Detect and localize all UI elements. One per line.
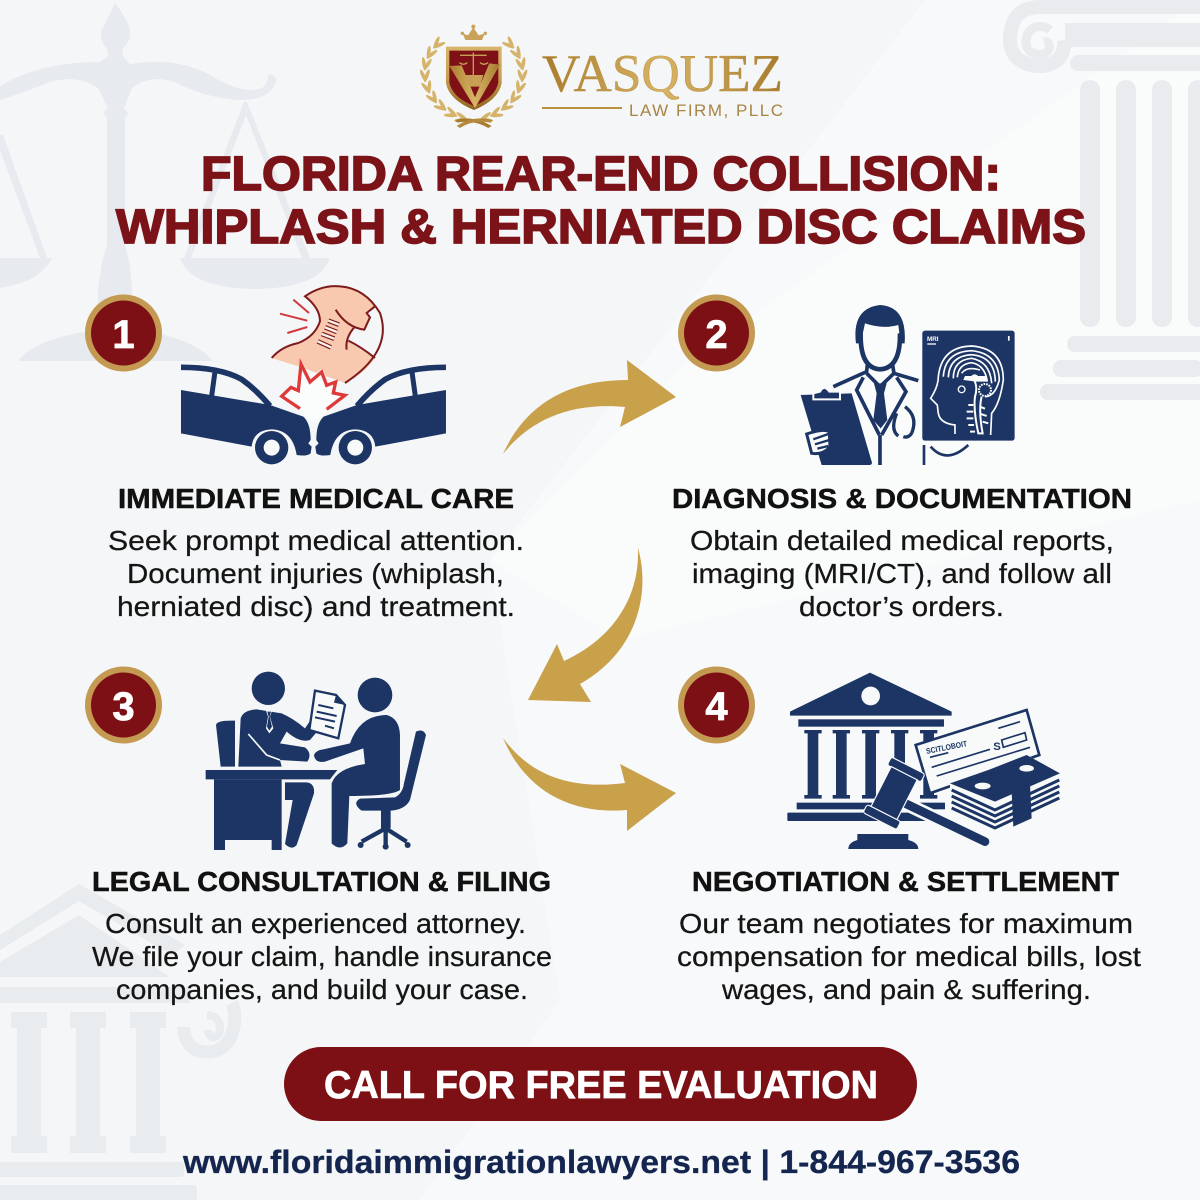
icon: car collision and neck injury xyxy=(181,286,446,464)
courthouse xyxy=(787,673,952,821)
logo xyxy=(418,25,783,128)
attorney xyxy=(216,672,324,767)
body 4: compensation for medical bills, lost xyxy=(677,941,1141,972)
body 3: We file your claim, handle insurance xyxy=(92,941,552,972)
badge 1: 1 xyxy=(112,313,135,357)
client xyxy=(314,678,426,850)
heading 3: LEGAL CONSULTATION & FILING xyxy=(92,866,551,897)
badge 4 xyxy=(678,666,755,744)
body 2: imaging (MRI/CT), and follow all xyxy=(692,558,1112,589)
doctor xyxy=(833,305,918,465)
logo tagline: LAW FIRM, PLLC xyxy=(629,101,783,120)
badge 4: 4 xyxy=(705,685,728,729)
body 2: Obtain detailed medical reports, xyxy=(690,525,1114,556)
body 4: wages, and pain & suffering. xyxy=(721,974,1091,1005)
body 4: Our team negotiates for maximum xyxy=(679,908,1133,939)
settlement check xyxy=(916,710,1039,793)
heading 4: NEGOTIATION & SETTLEMENT xyxy=(692,866,1119,897)
watermark: scales of justice xyxy=(0,3,330,361)
clipboard xyxy=(801,388,872,465)
MRI panel xyxy=(922,331,1015,465)
title xyxy=(116,148,1086,254)
wreath xyxy=(418,35,529,128)
badge 3 xyxy=(85,666,162,744)
heading 1: IMMEDIATE MEDICAL CARE xyxy=(118,483,514,514)
arrow: step 2 to 3 xyxy=(528,548,642,702)
body 1: herniated disc) and treatment. xyxy=(117,591,515,622)
body 1 xyxy=(108,525,524,622)
watermark: column xyxy=(1010,7,1200,400)
badge 2 xyxy=(678,294,755,372)
body 2: doctor’s orders. xyxy=(799,591,1004,622)
icon: doctor with MRI xyxy=(801,305,1015,465)
impact burst xyxy=(281,364,345,420)
arrow: step 3 to 4 xyxy=(503,738,676,831)
body 1: Document injuries (whiplash, xyxy=(127,558,504,589)
icon: courthouse, gavel, settlement xyxy=(787,673,1060,849)
watermark: courthouse xyxy=(0,884,235,1200)
neck injury xyxy=(272,286,383,383)
badge 2: 2 xyxy=(705,313,728,357)
cash stack xyxy=(950,755,1060,832)
right car xyxy=(315,367,446,464)
MRI panel: MRI xyxy=(927,336,939,343)
desk xyxy=(206,770,337,850)
title: FLORIDA REAR-END COLLISION: xyxy=(201,148,1001,201)
body 2 xyxy=(690,525,1114,622)
arrow: step 1 to 2 xyxy=(503,360,676,454)
title: WHIPLASH & HERNIATED DISC CLAIMS xyxy=(116,201,1086,254)
body 3 xyxy=(92,908,552,1005)
gavel xyxy=(848,758,985,849)
body 3: Consult an experienced attorney. xyxy=(105,908,526,939)
contact line: www.floridaimmigrationlawyers.net | 1-844-967-3536 xyxy=(182,1144,1020,1180)
badge 3: 3 xyxy=(112,685,135,729)
body 4 xyxy=(677,908,1141,1005)
body 3: companies, and build your case. xyxy=(116,974,528,1005)
icon: legal consultation xyxy=(206,672,426,850)
left car xyxy=(181,367,312,464)
call to action button xyxy=(284,1047,917,1121)
logo wordmark: VASQUEZ xyxy=(542,45,783,103)
document xyxy=(309,691,345,738)
settlement check: SCITLOBOIT xyxy=(925,739,968,756)
call to action button: CALL FOR FREE EVALUATION xyxy=(324,1064,878,1107)
body 1: Seek prompt medical attention. xyxy=(108,525,524,556)
badge 1 xyxy=(85,294,162,372)
cars xyxy=(181,367,446,464)
logo emblem xyxy=(418,25,529,128)
settlement check: S xyxy=(993,741,1001,753)
heading 2: DIAGNOSIS & DOCUMENTATION xyxy=(672,483,1132,514)
